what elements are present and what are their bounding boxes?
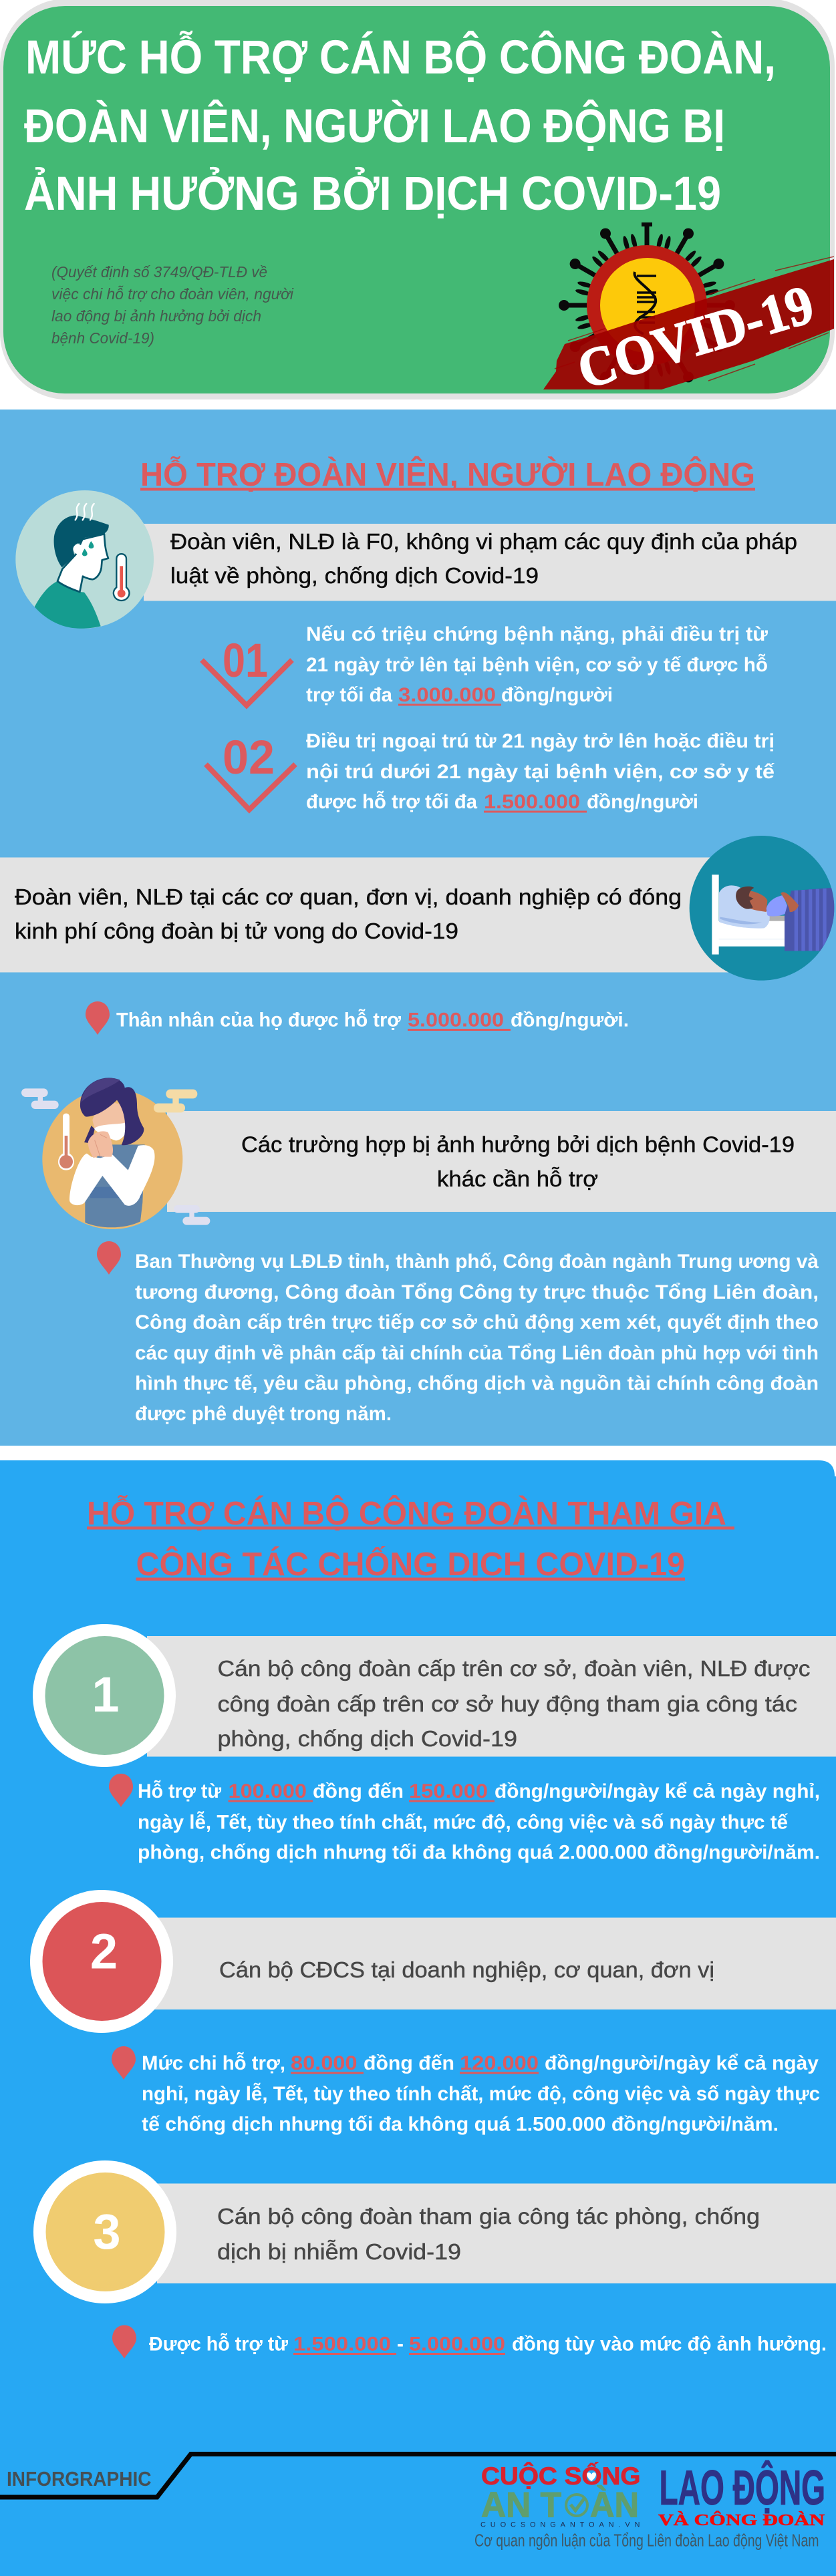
item 3 bbox=[33, 2160, 836, 2358]
callout: family support 5,000,000: đồng/người. bbox=[511, 1009, 629, 1031]
amount text 1: Hỗ trợ từ bbox=[138, 1780, 221, 1802]
heading: section 2: HỖ TRỢ CÁN BỘ CÔNG ĐOÀN THAM GIA bbox=[87, 1495, 726, 1532]
callout: other cases support: Ban Thường vụ LĐLĐ tỉnh, thành phố, Công đoàn ngành Trung ương và bbox=[135, 1251, 819, 1273]
band: F0 members bbox=[144, 524, 836, 601]
amount text 3: Được hỗ trợ từ bbox=[149, 2333, 288, 2356]
logo: cuoc song an toan: CUỘC SỐNG bbox=[481, 2462, 640, 2490]
item 1 bbox=[33, 1624, 836, 1864]
band bbox=[147, 1636, 836, 1757]
logo: lao dong va cong doan: VÀ CÔNG ĐOÀN bbox=[658, 2511, 825, 2529]
heading: section 1: HỖ TRỢ ĐOÀN VIÊN, NGƯỜI LAO ĐỘNG bbox=[140, 456, 755, 493]
amount text 2: tế chống dịch nhưng tối đa không quá 1.500.000 đồng/người/năm. bbox=[142, 2114, 779, 2135]
header panel bbox=[0, 0, 835, 400]
amount text 1: phòng, chống dịch nhưng tối đa không quá 2.000.000 đồng/người/năm. bbox=[138, 1841, 820, 1864]
band: công đoàn cấp trên cơ sở huy động tham gia công tác bbox=[218, 1692, 797, 1716]
callout: other cases support: được phê duyệt trong năm. bbox=[135, 1403, 392, 1425]
amount text 1: 150.000 bbox=[409, 1780, 488, 1802]
item 02: được hỗ trợ tối đa bbox=[306, 790, 477, 813]
icon: pin bbox=[109, 1774, 133, 1807]
item 01: đồng/người bbox=[501, 684, 613, 706]
amount text 2: Mức chi hỗ trợ, bbox=[142, 2052, 285, 2074]
heading: section 2: CÔNG TÁC CHỐNG DỊCH COVID-19 bbox=[136, 1546, 685, 1583]
amount text 1: 100.000 bbox=[229, 1780, 307, 1802]
icon: pin bbox=[97, 1241, 121, 1275]
heading: section 2 bbox=[87, 1495, 734, 1583]
title: ẢNH HƯỞNG BỞI DỊCH COVID-19 bbox=[24, 167, 721, 220]
band: Cán bộ CĐCS tại doanh nghiệp, cơ quan, đơn vị bbox=[219, 1957, 714, 1982]
band: phòng, chống dịch Covid-19 bbox=[218, 1726, 517, 1751]
callout: family support 5,000,000: 5.000.000 bbox=[408, 1009, 504, 1031]
icon: pin bbox=[112, 2325, 136, 2358]
icon: man with fever and thermometer bbox=[15, 490, 154, 629]
panel: support for union officers bbox=[0, 1460, 836, 2576]
number badge 2: 2 bbox=[90, 1924, 118, 1979]
callout: other cases support: tương đương, Công đoàn Tổng Công ty trực thuộc Tổng Liên đoàn, bbox=[135, 1281, 819, 1303]
amount text 2: 120.000 bbox=[460, 2052, 539, 2074]
amount text 2 bbox=[142, 2052, 820, 2135]
band: other affected cases: Các trường hợp bị ảnh hưởng bởi dịch bệnh Covid-19 bbox=[241, 1132, 795, 1157]
band: other affected cases bbox=[167, 1111, 836, 1212]
amount text 1: đồng đến bbox=[313, 1780, 404, 1802]
icon: covid virus with banner bbox=[543, 222, 834, 400]
item 01 bbox=[202, 623, 768, 706]
icon: woman coughing with mask bbox=[21, 1078, 210, 1229]
subtitle: decision reference: bệnh Covid-19) bbox=[51, 329, 154, 347]
item 01: 21 ngày trở lên tại bệnh viện, cơ sở y tế được hỗ bbox=[306, 653, 768, 676]
item 01: trợ tối đa bbox=[306, 684, 392, 706]
band: dịch bị nhiễm Covid-19 bbox=[217, 2239, 461, 2264]
amount text 2: đồng đến bbox=[364, 2052, 454, 2074]
amount text 3 bbox=[149, 2333, 827, 2356]
item 01: 3.000.000 bbox=[398, 684, 496, 706]
callout: family support 5,000,000 bbox=[86, 1001, 629, 1035]
logo: cuoc song an toan: AN T bbox=[481, 2485, 561, 2525]
footer label: INFORGRAPHIC bbox=[7, 2467, 151, 2490]
item 01: Nếu có triệu chứng bệnh nặng, phải điều trị từ bbox=[306, 623, 768, 645]
band: deceased members bbox=[0, 858, 728, 973]
subtitle: decision reference bbox=[51, 263, 294, 347]
number badge 1: 1 bbox=[92, 1667, 120, 1722]
item 01: 01 bbox=[223, 635, 268, 687]
band: deceased members: kinh phí công đoàn bị tử vong do Covid-19 bbox=[15, 919, 458, 943]
item 02: Điều trị ngoại trú từ 21 ngày trở lên hoặc điều trị bbox=[306, 730, 775, 752]
amount text 3: 5.000.000 bbox=[409, 2333, 505, 2356]
callout: other cases support bbox=[97, 1241, 819, 1425]
item 02: 1.500.000 bbox=[484, 791, 580, 813]
subtitle: decision reference: (Quyết định số 3749/QĐ-TLĐ về bbox=[51, 263, 267, 281]
amount text 2: đồng/người/ngày kể cả ngày bbox=[545, 2052, 819, 2074]
logo: cuoc song an toan: ÀN bbox=[590, 2485, 639, 2525]
band: Cán bộ công đoàn tham gia công tác phòng, chống bbox=[217, 2204, 760, 2229]
amount text 3: - bbox=[397, 2333, 404, 2356]
icon: pin bbox=[86, 1001, 110, 1035]
band bbox=[157, 2183, 836, 2283]
item 02: 02 bbox=[223, 732, 275, 784]
number badge 1 bbox=[33, 1624, 176, 1767]
item 02 bbox=[206, 730, 775, 813]
callout: other cases support: hình thực tế, yêu cầu phòng, chống dịch và nguồn tài chính công đoàn bbox=[135, 1372, 819, 1395]
band: other affected cases: khác cần hỗ trợ bbox=[437, 1166, 598, 1191]
title: ĐOÀN VIÊN, NGƯỜI LAO ĐỘNG BỊ bbox=[24, 100, 725, 153]
number badge 3 bbox=[33, 2160, 176, 2303]
amount text 1: đồng/người/ngày kể cả ngày nghỉ, bbox=[495, 1780, 820, 1802]
item 02: đồng/người bbox=[587, 791, 698, 813]
amount text 1 bbox=[138, 1780, 820, 1864]
amount text 1: ngày lễ, Tết, tùy theo tính chất, mức độ, công việc và số ngày thực tế bbox=[138, 1810, 788, 1833]
item 2 bbox=[30, 1890, 836, 2135]
icon: pin bbox=[112, 2046, 136, 2080]
title bbox=[24, 31, 776, 220]
logo: cuoc song an toan: CUOCSONGANTOAN.VN bbox=[480, 2521, 640, 2529]
band: F0 members: Đoàn viên, NLĐ là F0, không vi phạm các quy định của pháp bbox=[170, 529, 797, 554]
number badge 3: 3 bbox=[93, 2204, 121, 2259]
panel: support for union members and workers bbox=[0, 410, 836, 1446]
band bbox=[154, 1917, 836, 2009]
callout: other cases support: các quy định về phân cấp tài chính của Tổng Liên đoàn phù hợp với tình bbox=[135, 1342, 819, 1364]
icon: patient in bed bbox=[690, 836, 834, 981]
logo: cuoc song an toan bbox=[480, 2462, 640, 2529]
amount text 3: đồng tùy vào mức độ ảnh hưởng. bbox=[512, 2333, 827, 2356]
number badge 2 bbox=[30, 1890, 173, 2033]
item 02: nội trú dưới 21 ngày tại bệnh viện, cơ sở y tế bbox=[306, 761, 775, 783]
amount text 3: 1.500.000 bbox=[293, 2333, 391, 2356]
band: deceased members: Đoàn viên, NLĐ tại các cơ quan, đơn vị, doanh nghiệp có đóng bbox=[15, 884, 682, 909]
amount text 2: nghỉ, ngày lễ, Tết, tùy theo tính chất, mức độ, công việc và số ngày thực bbox=[142, 2082, 820, 2105]
band: Cán bộ công đoàn cấp trên cơ sở, đoàn viên, NLĐ được bbox=[218, 1656, 810, 1681]
callout: family support 5,000,000: Thân nhân của họ được hỗ trợ bbox=[116, 1009, 402, 1031]
subtitle: decision reference: lao động bị ảnh hưởng bởi dịch bbox=[51, 307, 261, 325]
footer divider line bbox=[0, 2454, 836, 2497]
icon: covid virus with banner: COVID-19 bbox=[571, 273, 820, 400]
amount text 2: 80.000 bbox=[291, 2052, 357, 2074]
callout: other cases support: Công đoàn cấp trên trực tiếp cơ sở chủ động xem xét, quyết định theo bbox=[135, 1311, 819, 1333]
band: F0 members: luật về phòng, chống dịch Covid-19 bbox=[170, 563, 539, 588]
subtitle: decision reference: việc chi hỗ trợ cho đoàn viên, người bbox=[51, 285, 294, 303]
